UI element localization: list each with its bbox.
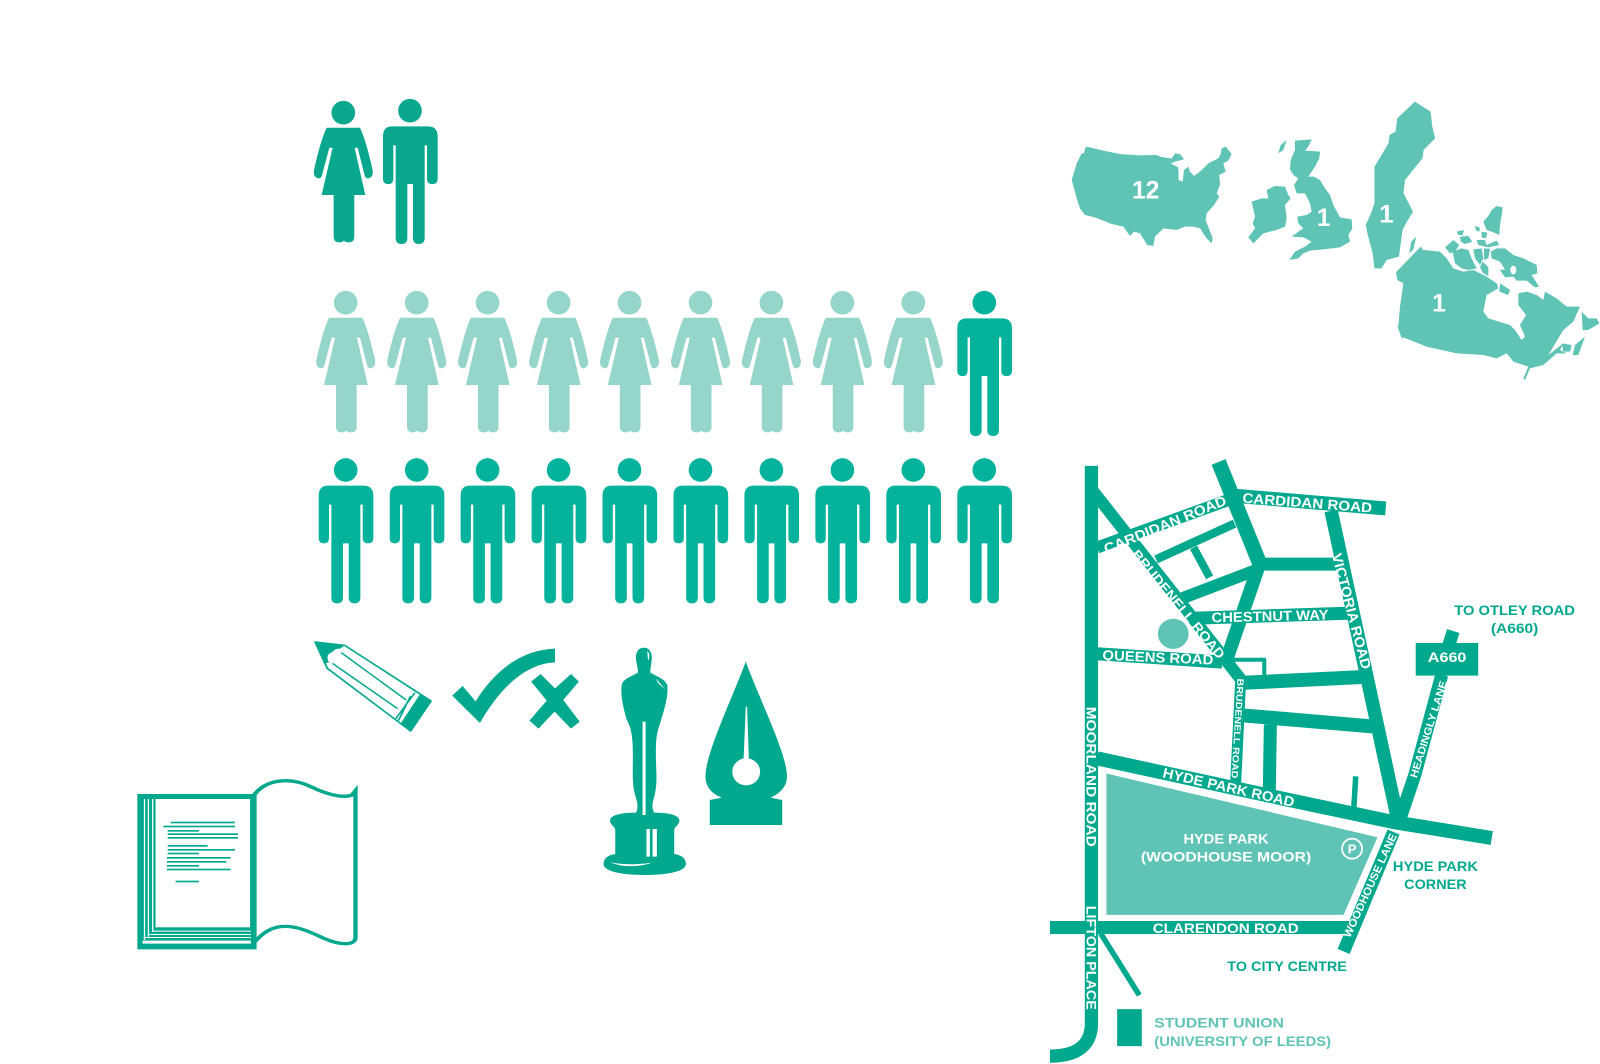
marker: location dot bbox=[1158, 619, 1189, 649]
pictogram row: ten men bbox=[319, 458, 1012, 603]
number: UK: 1 bbox=[1317, 205, 1331, 232]
callout: to Otley Road: TO OTLEY ROAD bbox=[1454, 602, 1575, 618]
icons group bbox=[137, 642, 787, 949]
legend line 1: STUDENT UNION bbox=[1154, 1015, 1284, 1031]
callout: Corner: CORNER bbox=[1404, 876, 1467, 892]
icon: check mark bbox=[452, 649, 555, 723]
map: USA bbox=[1072, 147, 1232, 246]
map geometry bbox=[1050, 462, 1492, 1056]
callout: A660: (A660) bbox=[1491, 620, 1538, 636]
icon: pencil bbox=[315, 642, 431, 731]
label: Brudenell Road diagonal: BRUDENELL ROAD bbox=[1129, 547, 1228, 662]
label: parking P: P bbox=[1348, 841, 1357, 856]
label: Brudenell Road vertical: BRUDENELL ROAD bbox=[1229, 678, 1245, 779]
map: Sweden bbox=[1366, 102, 1435, 268]
label: Victoria Road: VICTORIA ROAD bbox=[1329, 551, 1375, 671]
park: Hyde Park bbox=[1106, 774, 1377, 915]
couple: woman and man bbox=[314, 99, 438, 244]
pictogram row: nine women and one man bbox=[316, 291, 1012, 436]
number: Sweden: 1 bbox=[1379, 201, 1394, 229]
callouts bbox=[1227, 602, 1575, 974]
icon: fountain pen nib bbox=[705, 662, 787, 825]
label: Moorland Road: MOORLAND ROAD bbox=[1084, 707, 1100, 847]
icon: award statuette bbox=[604, 648, 686, 875]
icon: open book bbox=[137, 781, 355, 949]
legend: student union bbox=[1154, 1015, 1331, 1049]
callout: Hyde Park: HYDE PARK bbox=[1393, 858, 1478, 874]
label: Chestnut Way: CHESTNUT WAY bbox=[1211, 606, 1329, 625]
roads bbox=[1050, 462, 1492, 1056]
label: Hyde Park Road: HYDE PARK ROAD bbox=[1161, 765, 1296, 810]
road labels bbox=[1084, 490, 1467, 1010]
callout: to city centre: TO CITY CENTRE bbox=[1227, 958, 1347, 974]
label: Woodhouse Lane: WOODHOUSE LANE bbox=[1342, 832, 1400, 940]
marker: parking bbox=[1342, 839, 1362, 859]
label: Clarendon Road: CLARENDON ROAD bbox=[1153, 920, 1299, 936]
map: UK and Ireland bbox=[1248, 139, 1352, 260]
label: Queens Road: QUEENS ROAD bbox=[1102, 647, 1214, 668]
label: Cardidan Road west: CARDIDAN ROAD bbox=[1101, 492, 1229, 557]
street map bbox=[1050, 462, 1575, 1056]
label: Lifton Place: LIFTON PLACE bbox=[1084, 906, 1100, 1010]
label: Hyde Park name: HYDE PARK bbox=[1183, 830, 1269, 846]
icon: cross mark bbox=[529, 674, 580, 729]
number: Canada: 1 bbox=[1432, 291, 1446, 318]
map: Canada bbox=[1396, 206, 1599, 380]
marker: A660 sign bbox=[1416, 643, 1478, 676]
label: Cardidan Road east: CARDIDAN ROAD bbox=[1242, 490, 1373, 516]
label: Headingly Lane: HEADINGLY LANE bbox=[1408, 679, 1450, 779]
label: A660: A660 bbox=[1428, 649, 1467, 665]
number: USA: 12 bbox=[1132, 178, 1159, 205]
marker: student union bbox=[1117, 1009, 1142, 1046]
legend line 2: (UNIVERSITY OF LEEDS) bbox=[1154, 1033, 1331, 1049]
label: Woodhouse Moor: (WOODHOUSE MOOR) bbox=[1141, 848, 1311, 864]
